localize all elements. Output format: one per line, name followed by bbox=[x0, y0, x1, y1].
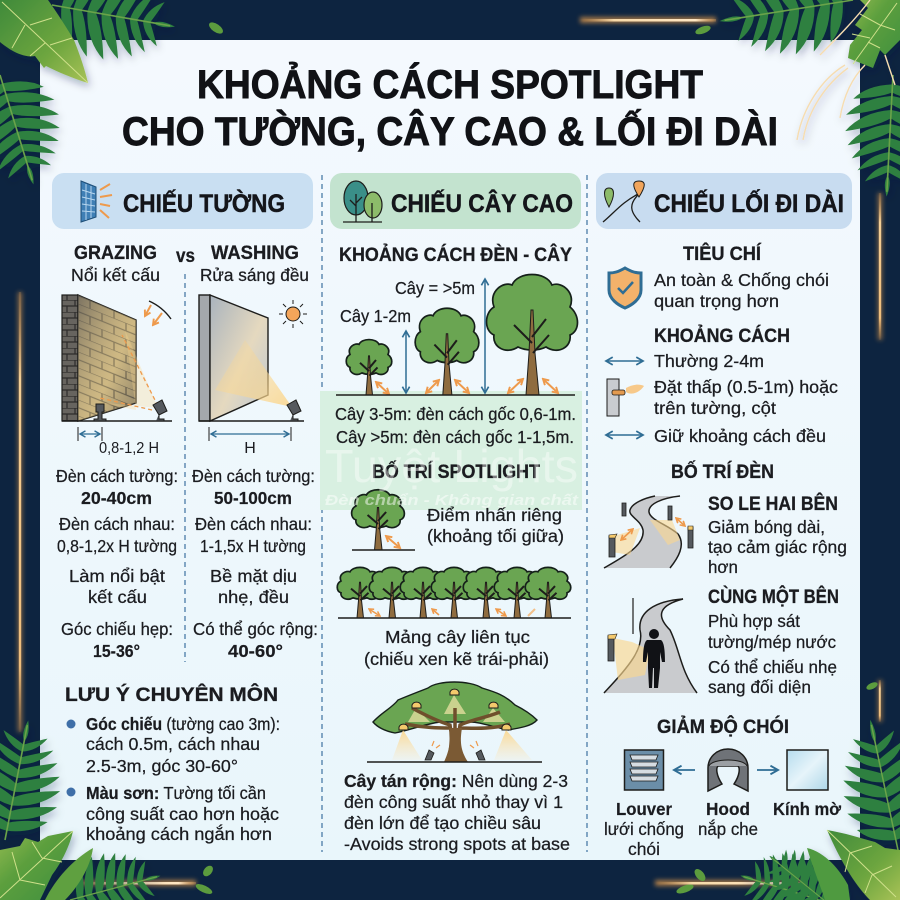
grazing vs washing headings: GRAZING bbox=[74, 242, 157, 264]
professional notes: Góc chiếu (tường cao 3m): bbox=[86, 714, 280, 734]
grazing specifications: 15-36° bbox=[93, 641, 140, 661]
criteria: TIÊU CHÍ bbox=[683, 241, 762, 265]
staggered text: SO LE HAI BÊN bbox=[708, 491, 838, 515]
glare option labels: chói bbox=[628, 839, 660, 859]
professional notes: LƯU Ý CHUYÊN MÔN bbox=[65, 682, 278, 706]
tree row bbox=[337, 567, 571, 669]
tree height diagram: Cây 1-2m bbox=[340, 306, 411, 326]
heading: bố trí spotlight: BỐ TRÍ SPOTLIGHT bbox=[372, 459, 540, 483]
wide canopy tree bbox=[367, 682, 542, 762]
header: chiếu cây cao: CHIẾU CÂY CAO bbox=[391, 188, 573, 218]
spacing: Thường 2-4m bbox=[654, 351, 764, 371]
panel: chiếu lối đi dài bbox=[596, 173, 852, 859]
wide canopy note: đèn lớn để tạo chiều sâu bbox=[344, 813, 541, 833]
header: chiếu tường bbox=[52, 173, 313, 229]
icon: hood bbox=[708, 749, 748, 791]
wide canopy note: đèn công suất nhỏ thay vì 1 bbox=[344, 792, 563, 812]
header: chiếu tường: CHIẾU TƯỜNG bbox=[123, 188, 285, 218]
single tree accent: (khoảng tối giữa) bbox=[427, 526, 564, 546]
same side text: Phù hợp sát bbox=[708, 611, 800, 631]
criteria: quan trọng hơn bbox=[654, 291, 779, 311]
panel: chiếu cây cao bbox=[330, 173, 581, 854]
tree row: (chiếu xen kẽ trái-phải) bbox=[364, 649, 549, 669]
grazing vs washing headings: WASHING bbox=[211, 242, 299, 264]
illustration: same side road bbox=[604, 598, 697, 693]
grazing specifications: Đèn cách nhau: bbox=[59, 514, 175, 534]
illustration: washing wall bbox=[199, 295, 304, 421]
dimension: washing bbox=[209, 427, 291, 457]
spacing bbox=[606, 324, 838, 446]
washing specifications: Đèn cách nhau: bbox=[195, 514, 312, 534]
wide canopy note: -Avoids strong spots at base bbox=[344, 834, 570, 854]
dimension: washing: H bbox=[244, 440, 256, 457]
glare option labels: nắp che bbox=[698, 818, 758, 839]
illustration: staggered road bbox=[604, 496, 693, 568]
professional notes: cách 0.5m, cách nhau bbox=[86, 734, 260, 754]
same side text: Có thể chiếu nhẹ bbox=[708, 657, 837, 677]
staggered text: tạo cảm giác rộng bbox=[708, 537, 847, 557]
grazing vs washing headings: vs bbox=[176, 245, 195, 267]
same side text: sang đối diện bbox=[708, 677, 811, 697]
grazing vs washing headings: Rửa sáng đều bbox=[200, 265, 309, 285]
header: chiếu lối đi dài: CHIẾU LỐI ĐI DÀI bbox=[654, 188, 844, 218]
tree height diagram bbox=[336, 274, 578, 395]
distance notes: Cây 3-5m: đèn cách gốc 0,6-1m. bbox=[335, 404, 576, 424]
spacing: trên tường, cột bbox=[654, 398, 776, 418]
staggered text bbox=[708, 491, 847, 577]
title: CHO TƯỜNG, CÂY CAO & LỐI ĐI DÀI bbox=[122, 108, 778, 154]
foliage: top-right bbox=[712, 0, 900, 199]
glare option labels: Louver bbox=[616, 799, 672, 819]
grazing specifications: Làm nổi bật bbox=[69, 566, 165, 586]
same side text bbox=[708, 584, 839, 697]
dimension: grazing bbox=[78, 427, 159, 457]
glare option labels bbox=[604, 799, 842, 859]
illustration: grazing wall bbox=[62, 295, 172, 421]
professional notes bbox=[65, 682, 280, 844]
single tree accent: Điểm nhấn riêng bbox=[427, 505, 562, 525]
washing specifications: 1-1,5x H tường bbox=[200, 536, 306, 556]
staggered text: Giảm bóng dài, bbox=[708, 517, 825, 537]
wide canopy note bbox=[344, 771, 570, 854]
criteria: An toàn & Chống chói bbox=[654, 270, 829, 290]
glare option labels: Kính mờ bbox=[773, 799, 842, 819]
washing specifications: 40-60° bbox=[228, 641, 283, 661]
watermark: Tuyệt Lights bbox=[325, 440, 578, 492]
header: chiếu cây cao bbox=[330, 173, 581, 229]
professional notes: công suất cao hơn hoặc bbox=[86, 804, 279, 824]
icon: sun bbox=[279, 300, 307, 328]
glare option labels: Hood bbox=[706, 799, 750, 819]
tree row: Mảng cây liên tục bbox=[385, 627, 530, 647]
wide canopy note: Cây tán rộng: Nên dùng 2-3 bbox=[344, 771, 568, 791]
tree height diagram: Cây = >5m bbox=[395, 278, 475, 298]
professional notes: 2.5-3m, góc 30-60° bbox=[86, 756, 238, 776]
heading: bố trí đèn: BỐ TRÍ ĐÈN bbox=[671, 459, 774, 483]
washing specifications: Bề mặt dịu bbox=[210, 566, 297, 586]
spacing: KHOẢNG CÁCH bbox=[654, 324, 790, 347]
same side text: CÙNG MỘT BÊN bbox=[708, 584, 839, 608]
professional notes: Màu sơn: Tường tối cần bbox=[86, 783, 266, 803]
spacing: Giữ khoảng cách đều bbox=[654, 426, 826, 446]
washing specifications: Đèn cách tường: bbox=[192, 466, 315, 486]
distance notes: Cây >5m: đèn cách gốc 1-1,5m. bbox=[336, 427, 574, 447]
staggered text: hơn bbox=[708, 557, 738, 577]
panel: chiếu tường bbox=[52, 173, 318, 844]
grazing specifications: kết cấu bbox=[88, 587, 147, 607]
header: chiếu lối đi dài bbox=[596, 173, 852, 229]
grazing specifications bbox=[56, 466, 178, 661]
washing specifications: nhẹ, đều bbox=[218, 587, 289, 607]
grazing vs washing headings bbox=[71, 242, 309, 285]
icon: walking person bbox=[643, 629, 665, 688]
washing specifications: 50-100cm bbox=[214, 488, 292, 508]
dimension: grazing: 0,8-1,2 H bbox=[99, 440, 159, 457]
title: KHOẢNG CÁCH SPOTLIGHT bbox=[197, 61, 703, 107]
washing specifications bbox=[192, 466, 318, 661]
icon: frosted glass bbox=[787, 750, 828, 790]
column dividers bbox=[185, 175, 587, 852]
heading: khoảng cách đèn - cây: KHOẢNG CÁCH ĐÈN - CÂY bbox=[339, 242, 572, 266]
grazing specifications: Góc chiếu hẹp: bbox=[61, 619, 173, 639]
foliage: bottom-right bbox=[730, 711, 900, 900]
same side text: tường/mép nước bbox=[708, 632, 836, 652]
spacing: Đặt thấp (0.5-1m) hoặc bbox=[654, 377, 838, 397]
watermark: Đèn chuẩn - Không gian chất bbox=[325, 492, 579, 509]
professional notes: khoảng cách ngắn hơn bbox=[86, 823, 272, 844]
single tree accent bbox=[352, 490, 564, 550]
heading: giảm độ chói: GIẢM ĐỘ CHÓI bbox=[657, 714, 789, 738]
distance notes bbox=[335, 404, 576, 447]
criteria bbox=[609, 241, 829, 311]
small floating leaves bbox=[194, 20, 879, 896]
grazing specifications: 0,8-1,2x H tường bbox=[57, 536, 177, 556]
grazing vs washing headings: Nổi kết cấu bbox=[71, 265, 160, 285]
arrows between glare options bbox=[674, 769, 778, 771]
icon: louver bbox=[624, 750, 664, 790]
glare option labels: lưới chống bbox=[604, 819, 684, 839]
washing specifications: Có thể góc rộng: bbox=[193, 619, 318, 639]
grazing specifications: 20-40cm bbox=[81, 488, 152, 508]
grazing specifications: Đèn cách tường: bbox=[56, 466, 178, 486]
foliage: top-left bbox=[0, 0, 183, 197]
watermark band bbox=[320, 391, 582, 510]
foliage: bottom-left bbox=[0, 712, 170, 900]
title bbox=[122, 61, 778, 154]
